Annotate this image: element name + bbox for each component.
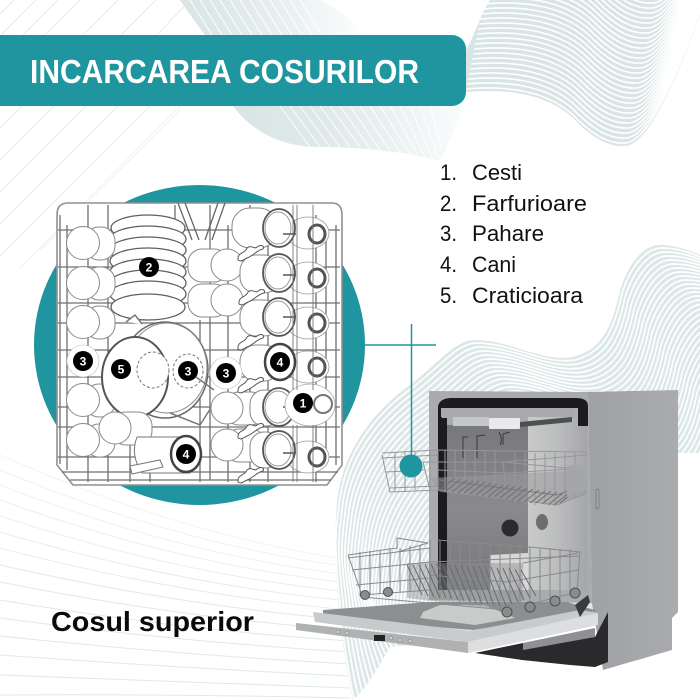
- numbered legend list: [440, 160, 587, 308]
- upper basket slide: [567, 464, 587, 497]
- white halos for item 3: [67, 345, 242, 389]
- item 5: 5.: [440, 283, 457, 308]
- wall pipes: [463, 432, 510, 458]
- badge 3 left: [73, 351, 93, 371]
- front frame: [429, 391, 592, 603]
- right mug bodies: [232, 208, 280, 468]
- badge 3 right: 3: [223, 366, 230, 380]
- door tub: [323, 602, 598, 630]
- lower cup next to pot: [99, 412, 152, 445]
- plinth: [475, 612, 608, 667]
- badge 4 lower: [176, 444, 196, 464]
- pot handle wire: [170, 377, 216, 425]
- back wall: [447, 425, 528, 590]
- display: [374, 635, 385, 641]
- badge 3 left: 3: [80, 354, 87, 368]
- connector lines: [365, 324, 436, 460]
- item 5: Craticioara: [472, 283, 584, 308]
- badge 2: 2: [146, 260, 153, 274]
- white bracket: [489, 418, 520, 429]
- teal circle behind rack: [34, 185, 365, 505]
- rack uprights over cups: [293, 205, 313, 482]
- mug handles: [238, 246, 265, 483]
- badge 3 right: [216, 363, 236, 383]
- door right arm: [468, 613, 598, 653]
- hidden glass outlines: [137, 352, 203, 388]
- drain disc: [502, 520, 518, 536]
- background wave top right: [466, 0, 700, 146]
- item 2: 2.: [440, 191, 457, 216]
- title banner: [0, 35, 466, 106]
- badge 1: 1: [300, 396, 307, 410]
- spray arm bar: [441, 408, 575, 417]
- badge 3 centre: 3: [185, 364, 192, 378]
- badge 4 lower: 4: [183, 448, 190, 462]
- lower basket: [348, 538, 580, 612]
- interior right wall: [528, 400, 587, 590]
- dishwasher: [296, 390, 678, 670]
- top dark band: [438, 398, 588, 426]
- lower basket wheels: [360, 588, 580, 617]
- badge 4 upper: 4: [277, 356, 284, 370]
- badge 5: [111, 359, 131, 379]
- item 3: 3.: [440, 221, 457, 246]
- badge 3 centre: [178, 361, 198, 381]
- upper rail right: [520, 417, 572, 427]
- lower basket tines: [407, 564, 536, 606]
- bottom-left fan lines: [0, 455, 350, 698]
- item 2: plates: [110, 215, 186, 320]
- inner rims and spoons: [265, 212, 296, 466]
- upper rail left: [453, 417, 489, 426]
- item 3: [440, 221, 544, 246]
- lower basket tone: [407, 563, 523, 610]
- far right small cups: [309, 225, 325, 466]
- caption: Cosul superior: [51, 606, 254, 637]
- left black strip: [438, 418, 447, 590]
- rack frame: [57, 203, 342, 485]
- item 4: 4.: [440, 252, 457, 277]
- upper basket tines: [440, 478, 575, 505]
- highlighted item 1 cup: [285, 384, 335, 426]
- plinth top band: [523, 628, 595, 650]
- upper basket tone: [430, 470, 587, 505]
- dark reflection: [536, 514, 548, 530]
- upper basket: [382, 450, 587, 505]
- item 1: [440, 160, 522, 185]
- item 3: Pahare: [472, 221, 544, 246]
- right column cups rings: [263, 209, 295, 469]
- badge 4 upper: [270, 352, 290, 372]
- pot body: [122, 322, 208, 418]
- item 4: Cani: [472, 252, 516, 277]
- badge 5: 5: [118, 362, 125, 376]
- rack grid: [58, 203, 340, 482]
- item 1: 1.: [440, 160, 457, 185]
- item 2: Farfurioare: [472, 191, 587, 216]
- badge 1: [293, 393, 313, 413]
- side panel: [588, 390, 678, 670]
- door tub light panel: [420, 605, 515, 625]
- pot outer rim: [127, 323, 207, 413]
- item 1: Cesti: [472, 160, 522, 185]
- teal marker on basket: [400, 454, 422, 478]
- door control panel: [296, 623, 468, 653]
- lower wall light area: [490, 553, 528, 590]
- title text: INCARCAREA COSURILOR: [30, 53, 419, 90]
- badge 2: [139, 257, 159, 277]
- buttons: [336, 630, 412, 643]
- pot lid: [102, 337, 168, 417]
- wave tail lines: [336, 553, 402, 699]
- item 4: [440, 252, 516, 277]
- far right cup bodies: [287, 217, 329, 473]
- background fine lines, left: [0, 0, 190, 256]
- lower mug with handle: [130, 437, 190, 474]
- rack loading diagram: [57, 203, 342, 485]
- side panel bracket: [596, 489, 599, 509]
- middle mugs: [188, 249, 265, 462]
- background wave middle right: [335, 245, 700, 700]
- left row cups: [66, 226, 115, 457]
- door rim: [313, 610, 598, 642]
- item 4 rings: [171, 344, 295, 472]
- background wave top: [180, 0, 370, 35]
- door hinge: [575, 595, 590, 617]
- pot top handle: [126, 315, 142, 324]
